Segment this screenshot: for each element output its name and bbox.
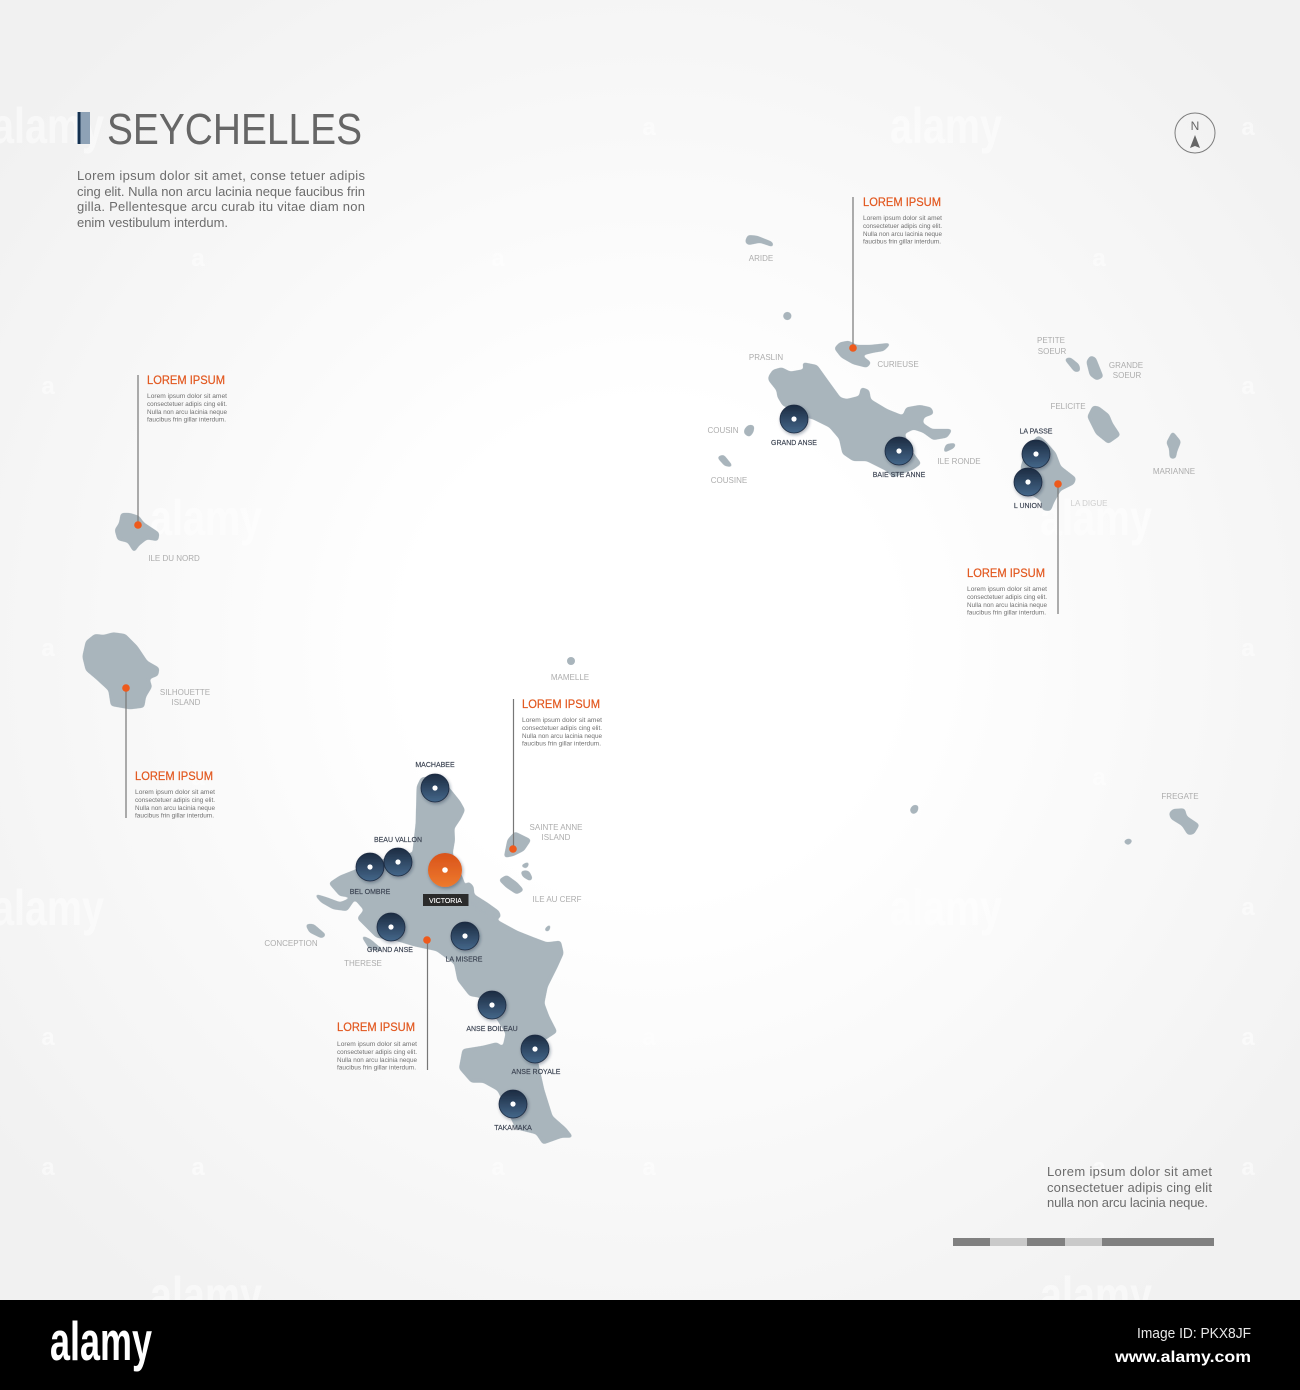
bottom right text: Lorem ipsum dolor sit amet	[1047, 1164, 1212, 1179]
callout: Sainte Anne: Nulla non arcu lacinia neque	[522, 733, 602, 740]
island names: SAINTE ANNE	[530, 823, 582, 832]
pin: La Misere	[446, 922, 483, 964]
watermark pattern: a	[642, 114, 656, 141]
pin: Anse Boileau: ANSE BOILEAU	[466, 1026, 518, 1033]
pin: Beau Vallon: BEAU VALLON	[374, 837, 422, 844]
watermark pattern: a	[191, 764, 205, 791]
footer bar: Image ID: PKX8JF	[1137, 1325, 1251, 1342]
callout: Ile du Nord: consectetuer adipis cing elit.	[147, 401, 227, 408]
watermark pattern: a	[191, 1154, 205, 1181]
island names: COUSIN	[707, 426, 739, 435]
watermark pattern: a	[1241, 635, 1255, 662]
map: Ile du Nord and Silhouette	[83, 514, 158, 708]
watermark pattern: a	[1092, 245, 1106, 272]
callout: Ile du Nord: LOREM IPSUM	[147, 373, 225, 387]
callout: Ile du Nord: faucibus frin gillar interdum.	[147, 416, 226, 424]
callout: Sainte Anne: consectetuer adipis cing elit.	[522, 725, 602, 732]
pin: Machabee: MACHABEE	[415, 762, 455, 769]
map: main island group (Mahe)	[307, 777, 572, 1143]
callout: La Digue	[967, 480, 1062, 616]
callout: Ile du Nord: Lorem ipsum dolor sit amet	[147, 393, 227, 400]
footer bar	[0, 1300, 1300, 1390]
callout: Silhouette: consectetuer adipis cing elit.	[135, 797, 215, 804]
island names: MAMELLE	[551, 673, 589, 682]
island names: FELICITE	[1050, 402, 1086, 411]
callout: Sainte Anne: Lorem ipsum dolor sit amet	[522, 717, 602, 724]
icon: compass	[1175, 113, 1215, 153]
pin: Anse Royale: ANSE ROYALE	[512, 1069, 561, 1076]
pin: Takamaka: TAKAMAKA	[494, 1125, 532, 1132]
bottom right text	[1047, 1164, 1212, 1210]
scale bar	[953, 1238, 1214, 1246]
callout: Sainte Anne: LOREM IPSUM	[522, 697, 600, 711]
island names: THERESE	[344, 959, 382, 968]
callout: Mahe south: consectetuer adipis cing elit.	[337, 1049, 417, 1056]
pin: Baie Ste Anne: BAIE STE ANNE	[873, 472, 926, 479]
title: SEYCHELLES	[107, 105, 362, 154]
watermark pattern: a	[1241, 1024, 1255, 1051]
callout: Curieuse: Nulla non arcu lacinia neque	[863, 231, 942, 238]
pin: Machabee	[415, 762, 455, 802]
callout: Sainte Anne: faucibus frin gillar interdum.	[522, 740, 601, 748]
callout: Curieuse: Lorem ipsum dolor sit amet	[863, 215, 942, 222]
watermark pattern: a	[191, 245, 205, 272]
callout: Curieuse: consectetuer adipis cing elit.	[863, 223, 942, 230]
map: Fregate and outlying islets	[911, 806, 1198, 844]
callout: Silhouette	[122, 684, 215, 820]
watermark pattern: a	[1092, 764, 1106, 791]
intro text	[77, 168, 366, 230]
callout: La Digue: faucibus frin gillar interdum.	[967, 610, 1046, 616]
island names: PRASLIN	[749, 353, 783, 362]
watermark pattern: a	[1241, 114, 1255, 141]
pin: L Union: L UNION	[1014, 503, 1042, 510]
pin: Grand Anse Mahe: GRAND ANSE	[367, 947, 413, 954]
callout: Mahe south: Nulla non arcu lacinia neque	[337, 1057, 417, 1064]
watermark pattern: alamy	[1040, 1267, 1152, 1323]
island names: SOEUR	[1113, 371, 1141, 380]
callout: La Digue: Lorem ipsum dolor sit amet	[967, 586, 1047, 593]
callout: Ile du Nord	[134, 373, 227, 529]
pin: Grand Anse Mahe	[367, 913, 413, 954]
pin: L Union	[1014, 468, 1042, 510]
watermark pattern: a	[642, 1154, 656, 1181]
callout: Mahe south: Lorem ipsum dolor sit amet	[337, 1041, 417, 1048]
intro text: enim vestibulum interdum.	[77, 215, 228, 230]
map: La Digue group	[1022, 357, 1180, 510]
bottom right text: consectetuer adipis cing elit	[1047, 1180, 1212, 1195]
island names: GRANDE	[1109, 361, 1143, 370]
callout: Curieuse	[849, 195, 942, 352]
pin: Grand Anse Praslin	[771, 405, 817, 447]
island names: SOEUR	[1038, 347, 1066, 356]
island names: ILE RONDE	[937, 457, 981, 466]
callout: Ile du Nord: Nulla non arcu lacinia neque	[147, 409, 227, 416]
footer bar: alamy	[50, 1310, 152, 1372]
icon: compass: N	[1191, 119, 1199, 133]
intro text: gilla. Pellentesque arcu curab itu vitae diam non	[77, 199, 365, 214]
callout: Curieuse: LOREM IPSUM	[863, 195, 941, 209]
island names: PETITE	[1037, 336, 1065, 345]
pin: La Misere: LA MISERE	[446, 956, 483, 964]
callout: Mahe south: faucibus frin gillar interdum.	[337, 1064, 416, 1072]
callout: La Digue: consectetuer adipis cing elit.	[967, 594, 1047, 601]
watermark pattern: alamy	[150, 1267, 262, 1323]
callout: Sainte Anne	[509, 697, 602, 853]
pin: Baie Ste Anne	[873, 437, 926, 479]
pin: La Passe	[1020, 428, 1053, 468]
pin: Grand Anse Praslin: GRAND ANSE	[771, 440, 817, 447]
watermark pattern: a	[642, 1024, 656, 1051]
callout: Silhouette: Nulla non arcu lacinia neque	[135, 805, 215, 812]
island names: SILHOUETTE	[160, 688, 210, 697]
callout: Silhouette: Lorem ipsum dolor sit amet	[135, 789, 215, 796]
pin: Anse Royale	[512, 1035, 561, 1076]
callout: Silhouette: faucibus frin gillar interdum.	[135, 812, 214, 820]
intro text: cing elit. Nulla non arcu lacinia neque faucibus frin	[77, 184, 365, 199]
pin: Takamaka	[494, 1090, 532, 1132]
island names: CURIEUSE	[877, 360, 919, 369]
watermark pattern: a	[642, 635, 656, 662]
watermark pattern: alamy	[1040, 490, 1152, 546]
pin: Bel Ombre	[350, 853, 391, 896]
callout: Mahe south	[337, 936, 431, 1072]
callout: Mahe south: LOREM IPSUM	[337, 1020, 415, 1034]
pin: Beau Vallon	[374, 837, 422, 876]
island names: FREGATE	[1161, 792, 1199, 801]
watermark pattern: a	[1092, 1154, 1106, 1181]
pin: Victoria capital: VICTORIA	[429, 898, 462, 905]
island names: CONCEPTION	[264, 939, 318, 948]
watermark pattern: alamy	[890, 98, 1002, 154]
island names	[148, 254, 1199, 968]
island names: LA DIGUE	[1071, 499, 1107, 508]
footer bar: www.alamy.com	[1114, 1349, 1251, 1366]
pin: Bel Ombre: BEL OMBRE	[350, 889, 391, 896]
watermark pattern: a	[491, 1154, 505, 1181]
island names: ISLAND	[542, 833, 571, 842]
watermark pattern: a	[41, 635, 55, 662]
bottom right text: nulla non arcu lacinia neque.	[1047, 1195, 1208, 1210]
watermark pattern: a	[491, 764, 505, 791]
island names: COUSINE	[711, 476, 747, 485]
map: Praslin group	[718, 236, 955, 477]
watermark pattern: a	[1241, 373, 1255, 400]
watermark pattern: alamy	[150, 490, 262, 546]
map: mamelle island	[567, 657, 575, 665]
watermark pattern: a	[41, 373, 55, 400]
island names: ILE AU CERF	[533, 895, 582, 904]
icon: title bar	[77, 112, 90, 144]
callout: Curieuse: faucibus frin gillar interdum.	[863, 238, 941, 246]
watermark pattern: a	[1241, 1154, 1255, 1181]
watermark pattern: a	[41, 1024, 55, 1051]
pin: La Passe: LA PASSE	[1020, 428, 1053, 436]
watermark pattern: a	[41, 1154, 55, 1181]
island names: ARIDE	[749, 254, 773, 263]
watermark pattern: a	[491, 504, 505, 531]
island names: ISLAND	[172, 698, 201, 707]
callout: La Digue: Nulla non arcu lacinia neque	[967, 602, 1047, 609]
island names: ILE DU NORD	[148, 554, 200, 563]
pin: Victoria capital	[423, 853, 468, 906]
watermark pattern: alamy	[890, 880, 1002, 936]
watermark pattern: a	[491, 245, 505, 272]
pin: Anse Boileau	[466, 991, 518, 1033]
callout: Silhouette: LOREM IPSUM	[135, 769, 213, 783]
island names: MARIANNE	[1153, 467, 1195, 476]
watermark pattern: a	[1241, 894, 1255, 921]
watermark pattern: a	[642, 373, 656, 400]
intro text: Lorem ipsum dolor sit amet, conse tetuer adipis	[77, 168, 366, 183]
callout: La Digue: LOREM IPSUM	[967, 566, 1045, 580]
watermark pattern: a	[642, 894, 656, 921]
